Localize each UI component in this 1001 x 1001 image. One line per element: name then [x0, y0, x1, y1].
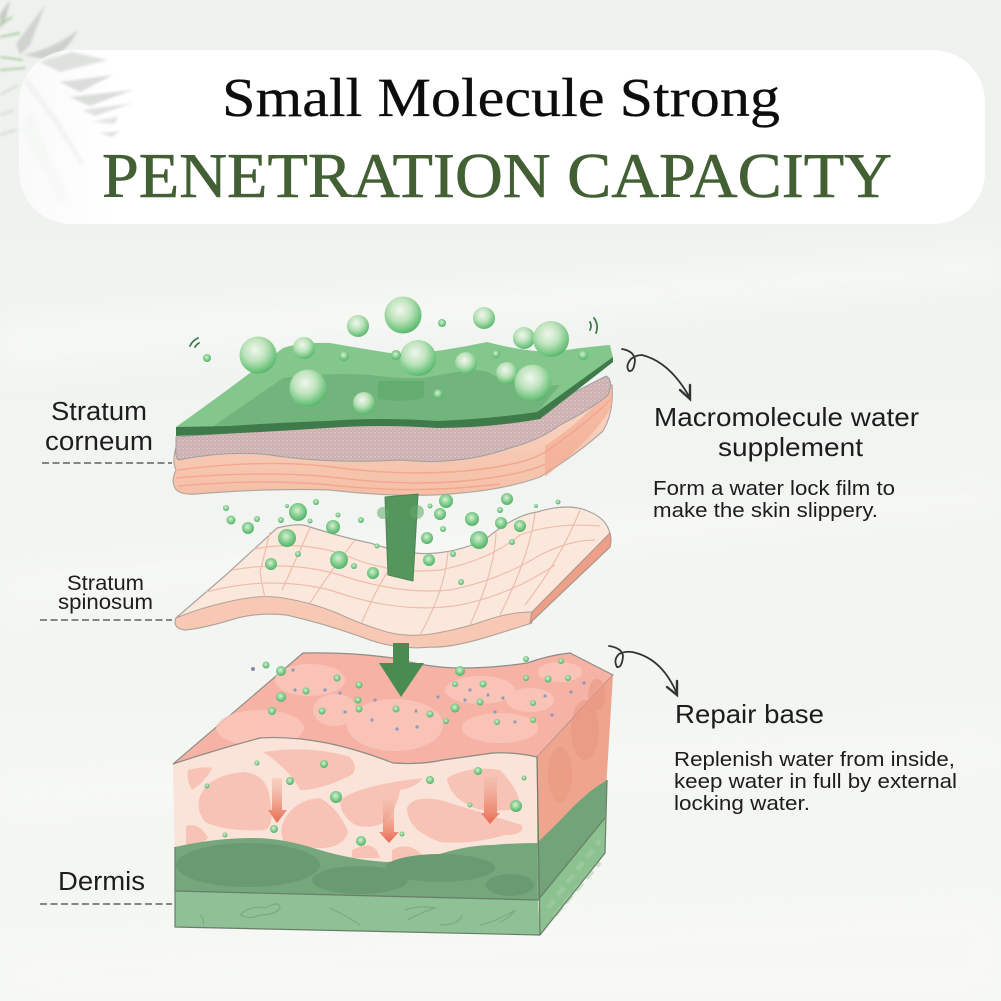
callout: macromolecule water supplement: make the skin slippery. [653, 500, 878, 522]
speckled band [176, 376, 611, 462]
callout: macromolecule water supplement: Form a water lock film to [653, 478, 895, 500]
tissue blobs [186, 749, 522, 862]
skin layer: dermis block [173, 653, 613, 935]
pink layered band [173, 385, 612, 495]
callout: repair base: Repair base [675, 699, 824, 729]
callout: macromolecule water supplement: Macromolecule water [654, 402, 919, 432]
particles on top face [251, 656, 586, 731]
small water particles [223, 493, 560, 585]
particles in front face [204, 760, 526, 846]
arrow: green arrow through layers [377, 494, 424, 581]
label: dermis: Dermis [58, 868, 145, 896]
curly arrow: macromolecule [622, 349, 690, 399]
water bubbles [203, 296, 588, 414]
front face [173, 738, 537, 870]
skin layer: stratum corneum [173, 296, 613, 495]
callout: macromolecule water supplement: supplement [718, 432, 864, 462]
label: stratum corneum: Stratum [51, 398, 147, 426]
callout: repair base: keep water in full by external [674, 771, 957, 793]
callout: repair base [674, 699, 957, 815]
skin layer: stratum spinosum [175, 507, 611, 648]
decoration: leaf shadow on panel [22, 52, 133, 205]
label: stratum spinosum [40, 572, 172, 620]
green film [176, 342, 613, 428]
callout: repair base: locking water. [674, 793, 810, 815]
label: stratum corneum: corneum [45, 428, 153, 456]
red arrows down [268, 777, 500, 843]
title panel [19, 50, 985, 224]
label: stratum spinosum: spinosum [58, 591, 153, 614]
grid lines [206, 510, 600, 635]
callout: macromolecule water supplement [653, 402, 919, 522]
top face [173, 653, 613, 764]
curly arrow: repair base [609, 646, 677, 695]
heading line 2: PENETRATION CAPACITY [102, 141, 892, 211]
label: stratum corneum [42, 398, 172, 463]
heading line 1: Small Molecule Strong [222, 67, 780, 128]
green lower band [175, 838, 538, 900]
label: stratum spinosum: Stratum [67, 572, 144, 595]
decoration: palm leaf outside panel [0, 0, 78, 135]
right face [537, 675, 613, 843]
splash marks [190, 318, 597, 347]
label: dermis [40, 868, 172, 904]
arrow: green arrow into dermis [379, 643, 424, 697]
callout: repair base: Replenish water from inside, [674, 749, 955, 771]
